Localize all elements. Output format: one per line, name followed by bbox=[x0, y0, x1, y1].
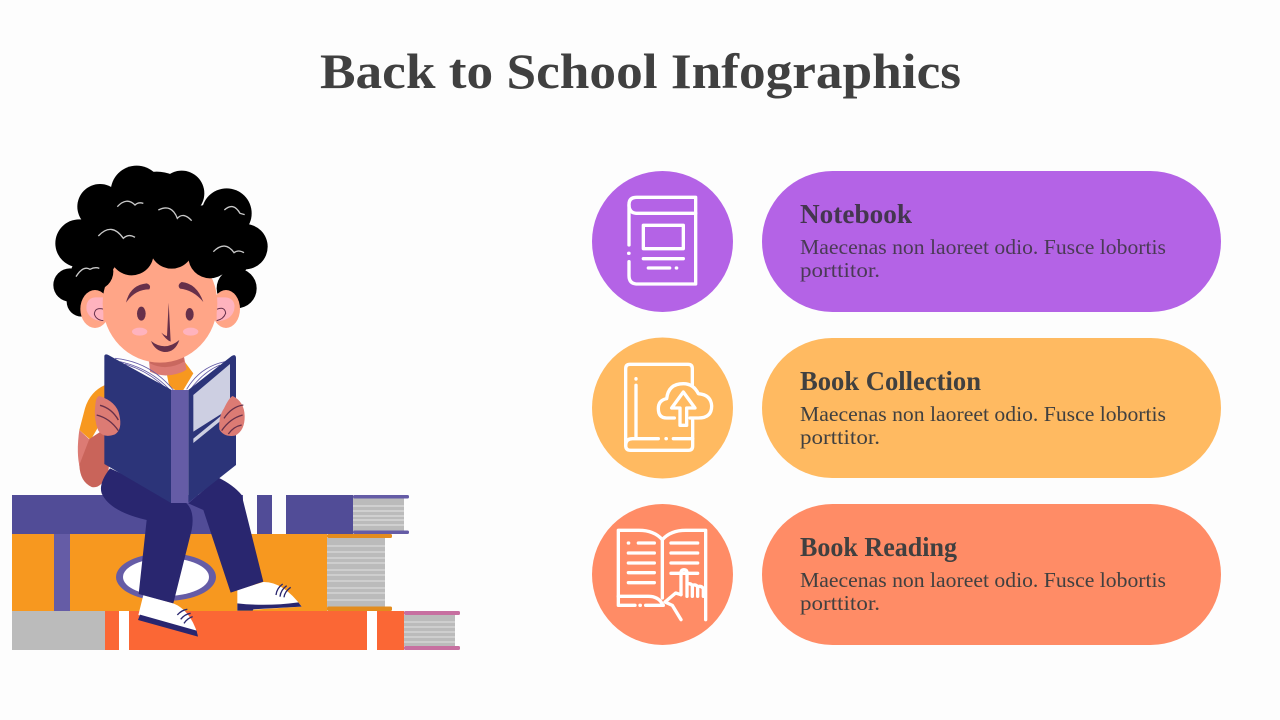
icon: cloud book bbox=[592, 338, 733, 478]
card: book collection: Book Collection bbox=[800, 366, 981, 396]
legs bbox=[188, 478, 263, 593]
hands bbox=[95, 396, 120, 436]
hair back bbox=[53, 253, 257, 317]
card: book collection: porttitor. bbox=[800, 425, 880, 449]
boy legs, shoes, open book and hands bbox=[95, 354, 302, 637]
pages bbox=[113, 358, 230, 393]
card: book collection: Maecenas non laoreet odio. Fusce lobortis bbox=[800, 402, 1166, 426]
card: book collection bbox=[762, 338, 1221, 478]
hair front bbox=[55, 166, 268, 290]
book cover bbox=[104, 354, 172, 503]
title: Back to School Infographics bbox=[320, 43, 961, 99]
card: book reading: porttitor. bbox=[800, 591, 880, 615]
panel: book reading bbox=[592, 504, 1221, 645]
card: notebook: Notebook bbox=[800, 199, 912, 229]
shoes bbox=[237, 582, 302, 611]
panel: book collection bbox=[592, 338, 1221, 478]
card: book reading bbox=[762, 504, 1221, 645]
icon: reading book bbox=[592, 504, 733, 645]
face details bbox=[126, 282, 203, 352]
icon: notebook bbox=[592, 171, 733, 312]
boy head and hair bbox=[53, 166, 268, 390]
illustration: boy reading on stack of books bbox=[12, 166, 460, 650]
boy body: shirt and arm bbox=[78, 360, 193, 487]
card: notebook: porttitor. bbox=[800, 258, 880, 282]
book stack bbox=[12, 495, 460, 650]
card: book reading: Maecenas non laoreet odio. Fusce lobortis bbox=[800, 568, 1166, 592]
ears bbox=[80, 290, 240, 328]
panel: notebook bbox=[592, 171, 1221, 312]
card: book reading: Book Reading bbox=[800, 532, 957, 562]
card: notebook bbox=[762, 171, 1221, 312]
card: notebook: Maecenas non laoreet odio. Fusce lobortis bbox=[800, 235, 1166, 259]
